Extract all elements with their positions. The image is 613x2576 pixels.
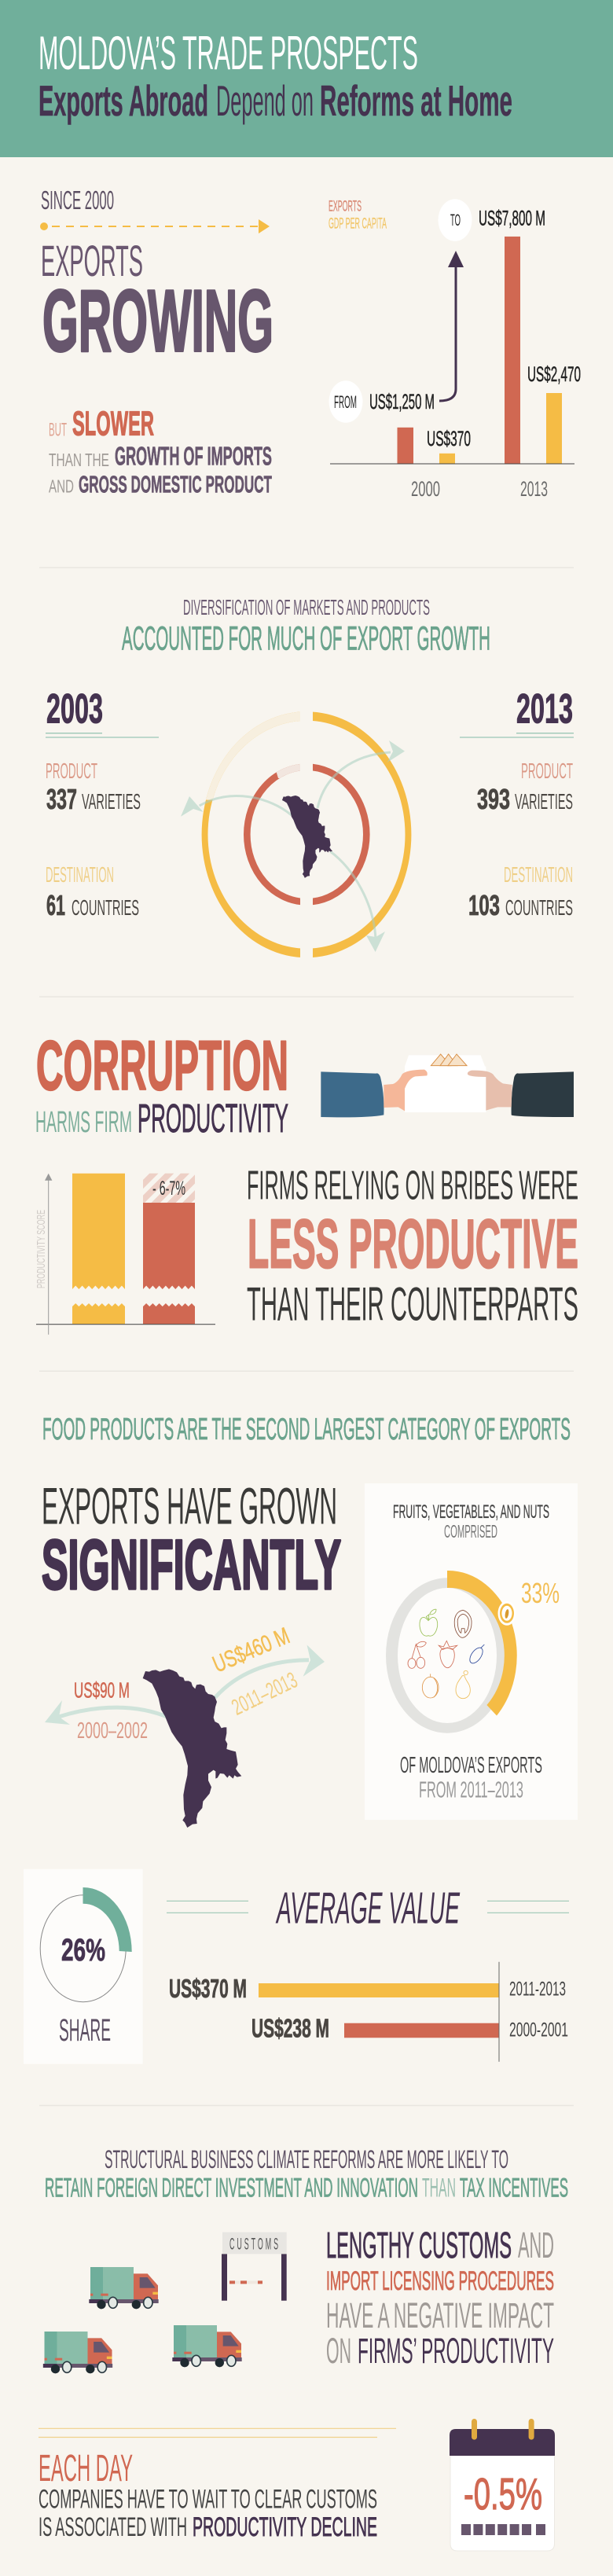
label: US$90 M — [74, 1678, 148, 1744]
icon: strawberry — [439, 1641, 457, 1668]
heading: exports have grown significantly: SIGNIFICANTLY — [42, 1525, 341, 1604]
legend — [329, 199, 387, 233]
heading: structural reforms — [45, 2145, 568, 2203]
bar chart: exports and GDP per capita: GDP PER CAPITA — [329, 216, 387, 233]
label: US$460 M: US$460 M — [209, 1623, 293, 1678]
chart: export growth flows from map — [45, 1623, 325, 1828]
icon: Moldova map — [282, 796, 332, 878]
heading: diversification — [122, 595, 490, 658]
calendar value: -0.5% — [464, 2469, 542, 2519]
text block: but slower: THAN THE — [49, 450, 109, 470]
heading: structural reforms: THAN — [422, 2173, 456, 2203]
since 2000 label: SINCE 2000 — [41, 186, 114, 215]
heading: corruption: CORRUPTION — [36, 1026, 288, 1104]
heading: corruption: HARMS FIRM — [35, 1106, 132, 1139]
legend: EXPORTS — [329, 199, 362, 215]
text block: but slower: GROSS DOMESTIC PRODUCT — [79, 470, 272, 498]
text block: each day: IS ASSOCIATED WITH — [39, 2512, 187, 2542]
card heading: COMPRISED — [444, 1521, 497, 1542]
axis label: PRODUCTIVITY SCORE — [35, 1210, 48, 1288]
arrow: from 2000 to 2013 — [439, 251, 464, 401]
value label: - 6-7% — [152, 1178, 185, 1200]
text block: lengthy customs — [326, 2225, 554, 2371]
heading: corruption — [35, 1026, 288, 1141]
panel: 2003 stats: DESTINATION — [46, 862, 114, 887]
arrows: export flows — [181, 740, 405, 952]
text block: but slower — [49, 405, 272, 498]
heading: exports have grown significantly — [42, 1477, 341, 1604]
donut chart: 33 percent — [386, 1571, 560, 1733]
bar: 2000-2001: US$238 M — [251, 2014, 329, 2043]
arrow: dashed timeline — [40, 219, 270, 233]
label: US$90 M: US$90 M — [74, 1678, 130, 1703]
inner ring: products — [247, 767, 366, 902]
icon: calendar — [450, 2419, 555, 2551]
subtitle: Exports Abroad — [39, 76, 208, 125]
bar: 2011-2013: 2011-2013 — [509, 1979, 566, 2001]
label: US$460 M: 2011–2013 — [228, 1668, 302, 1721]
panel: 2003 stats: VARIETIES — [82, 789, 141, 814]
text block: each day: EACH DAY — [39, 2448, 133, 2490]
panel: 2003 stats: 337 — [46, 783, 77, 815]
donut chart: 33 percent: 33% — [521, 1577, 560, 1609]
outer ring: destinations — [202, 711, 411, 957]
icon: truck 2 — [43, 2332, 112, 2373]
callout: to — [439, 199, 545, 241]
icon: truck 1 — [89, 2267, 159, 2309]
callout: from — [329, 380, 435, 423]
bar: 2000-2001 — [251, 2014, 568, 2043]
bar: 2011-2013: US$370 M — [169, 1974, 247, 2003]
bar chart: average value — [167, 1883, 569, 2062]
text block: lengthy customs: ON — [326, 2331, 351, 2371]
text block: less productive — [247, 1163, 578, 1330]
icon: apple — [420, 1609, 438, 1636]
panel: share card — [24, 1869, 143, 2064]
panel: 2013 stats: 393 — [477, 783, 510, 815]
panel: fruits vegetables and nuts card — [365, 1483, 578, 1820]
icon: truck 3 — [172, 2325, 242, 2367]
panel: 2003 stats — [46, 685, 159, 921]
subtitle — [39, 76, 512, 125]
icons: fruits and nuts — [408, 1609, 485, 1699]
icon: Moldova map large — [143, 1669, 241, 1828]
heading: exports growing: EXPORTS — [41, 236, 143, 285]
text block: each day — [39, 2428, 396, 2542]
axes — [36, 1174, 215, 1335]
icon: peach — [422, 1674, 439, 1698]
bar: firms relying on bribes — [143, 1174, 195, 1325]
heading: exports growing — [41, 236, 273, 369]
donut chart: 26 percent share: 26% — [61, 1933, 105, 1968]
panel: 2003 stats: COUNTRIES — [72, 895, 139, 920]
value labels: 2000 — [411, 477, 440, 501]
heading: exports growing: GROWING — [42, 272, 273, 369]
arrow: 2011-2013 — [215, 1644, 325, 1698]
callout: to: US$7,800 M — [479, 207, 545, 230]
icon: hands exchanging bribe envelope — [321, 1054, 574, 1117]
label: US$460 M — [209, 1623, 302, 1721]
callout: from: US$1,250 M — [369, 390, 435, 413]
value labels — [411, 362, 581, 501]
callout: to: TO — [450, 211, 461, 230]
value labels: 2013 — [520, 477, 548, 501]
text block: but slower: BUT — [49, 420, 67, 440]
label: US$90 M: 2000–2002 — [77, 1718, 148, 1744]
donut chart: 26 percent share — [40, 1887, 132, 2002]
panel: 2003 stats: 2003 — [46, 685, 103, 732]
icon: plum — [468, 1644, 485, 1666]
panel: exports growing text — [40, 186, 273, 498]
text block: each day: PRODUCTIVITY DECLINE — [193, 2512, 377, 2542]
heading: corruption: PRODUCTIVITY — [138, 1096, 288, 1141]
bars — [330, 237, 574, 464]
header banner — [0, 0, 613, 157]
icon: walnut — [454, 1610, 472, 1637]
arrow: 2000-2002 — [45, 1700, 169, 1725]
panel: 2013 stats: 2013 — [516, 685, 573, 732]
callout: from: FROM — [334, 392, 357, 412]
infographic canvas: CUSTOMS — [229, 2236, 281, 2254]
bar: 2000-2001: 2000-2001 — [509, 2019, 568, 2041]
panel: 2013 stats — [460, 685, 574, 921]
chart: concentric diversification rings with map — [181, 704, 411, 967]
bar: firms not paying bribes — [72, 1174, 125, 1325]
bar chart: productivity score — [35, 1174, 215, 1335]
bar: 2011-2013 — [169, 1974, 566, 2003]
panel: share card: SHARE — [59, 2013, 111, 2048]
panel: 2013 stats: 103 — [468, 889, 500, 921]
panel: 2003 stats: PRODUCT — [46, 759, 97, 783]
card caption: FROM 2011–2013 — [419, 1778, 523, 1803]
icon: pear — [456, 1670, 470, 1699]
card heading — [393, 1501, 549, 1542]
subtitle: Depend on — [216, 76, 314, 125]
text block: but slower: GROWTH OF IMPORTS — [115, 442, 272, 470]
bar chart: exports and GDP per capita — [329, 199, 581, 501]
card caption — [400, 1753, 542, 1803]
icon: cherries — [408, 1641, 426, 1668]
text block: but slower: SLOWER — [72, 405, 154, 443]
text block: but slower: AND — [49, 476, 74, 496]
value labels: US$370 — [427, 427, 471, 450]
infographic canvas: AND — [518, 2225, 554, 2265]
panel: 2003 stats: 61 — [46, 889, 65, 921]
icon: customs gate — [222, 2232, 287, 2301]
